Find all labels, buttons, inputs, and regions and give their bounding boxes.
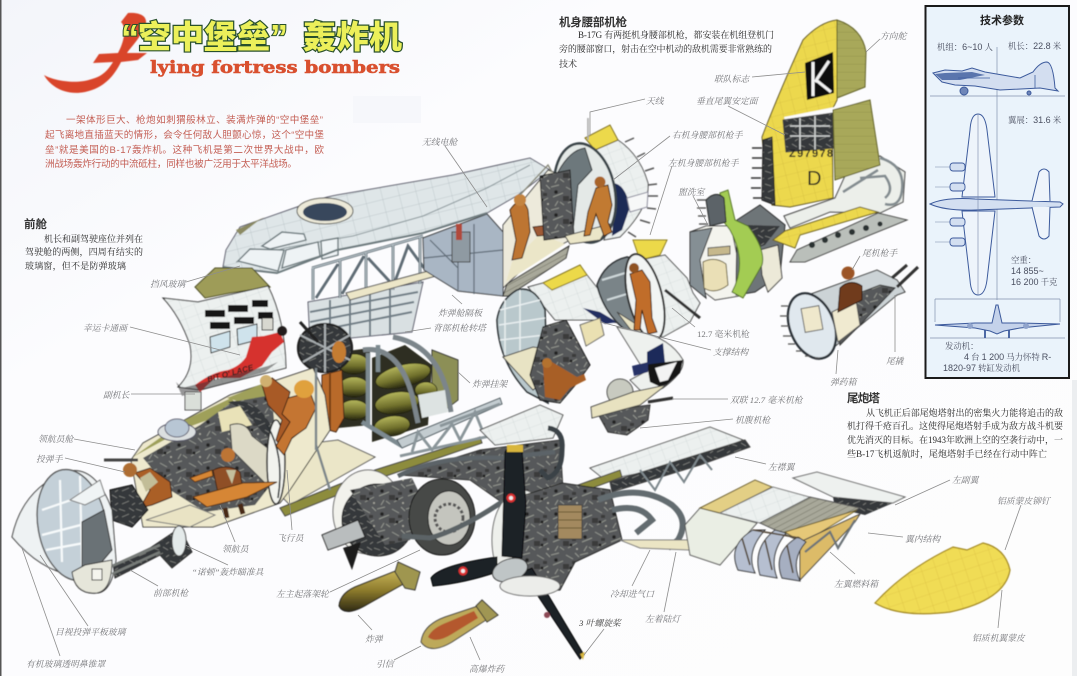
label: 领航员舱: 领航员舱 [38,434,74,444]
label: 投弹手: 投弹手 [36,454,64,464]
intro text [45,114,324,170]
label: 炸弹舱隔板: 炸弹舱隔板 [438,308,483,318]
label: 3叶螺旋桨: 3 叶螺旋桨 [578,618,622,628]
bombardier [135,468,172,508]
label: 副机长: 副机长 [103,390,131,400]
label: 无线电舱: 无线电舱 [422,137,458,147]
spec values: 机组：6~10 人 [937,42,994,52]
label: 炸弹 [358,615,384,644]
label: 支撑结构 [600,322,749,357]
label: 高爆炸药 [469,637,505,674]
title: Chinese headline: 轰炸机 [303,19,402,55]
label: 领航员 [220,505,250,554]
label: 引信 [376,646,421,669]
label: 冷却进气口 [610,550,655,599]
label: 联队标志: 联队标志 [714,74,750,84]
section: vertical tail fin: D [807,168,821,190]
section: cockpit shell with nose art [163,268,287,410]
label: 副机长 [103,390,195,400]
text block: waist guns: 机身腰部机枪 [559,15,628,29]
text block: tail turret: 优先消灭的目标。在1943年欧洲上空的空袭行动中，一 [847,434,1063,446]
label: 高爆炸药: 高爆炸药 [469,664,505,674]
label: 铝质蒙皮铆钉 [997,496,1052,550]
section: waist section with gunner and insignia [540,118,658,247]
section: grey-blue radio bay panels [423,214,503,296]
label: 天线: 天线 [646,96,665,106]
label: 背部机枪转塔 [405,323,488,333]
section: rear fuselage star insignia [617,327,683,395]
text block: waist guns: 技术 [559,58,577,69]
label: 3叶螺旋桨 [578,618,622,655]
label: 飞行员 [277,470,305,543]
label: 挡风玻璃 [150,266,240,289]
section: bomb [339,562,420,612]
label: 炸弹挂架 [458,372,508,389]
label: 左主起落架轮: 左主起落架轮 [276,589,330,599]
section: forward fuselage with navigator station [104,368,330,527]
label: 双联12.7毫米机枪: 双联 12.7 毫米机枪 [730,395,804,405]
label: 左襟翼 [735,457,796,472]
text block: waist guns: 旁的腰部窗口，射击在空中机动的敌机需要非常熟练的 [559,43,772,55]
section: outer wing with ribs and fuel tanks [685,472,905,581]
title: English subtitle: lying fortress bombers [150,58,400,78]
label: 尾机枪手 [852,248,898,270]
spec values: 1820-97 转缸发动机 [943,363,1021,373]
label: 炸弹: 炸弹 [365,634,384,644]
text block: forward cabin [24,217,143,272]
label: 左副翼: 左副翼 [952,475,980,485]
section: inboard engine and mechanics [322,428,563,570]
label: 有机玻璃透明鼻锥罩: 有机玻璃透明鼻锥罩 [26,659,106,669]
title: Chinese headline: “ [121,17,139,58]
label: 铝质蒙皮铆钉: 铝质蒙皮铆钉 [997,496,1052,506]
label: 机腹机枪: 机腹机枪 [735,415,771,425]
label: 冷却进气口: 冷却进气口 [610,589,655,599]
label: 弹药箱: 弹药箱 [830,377,858,387]
label: 铝质机翼蒙皮: 铝质机翼蒙皮 [972,633,1026,643]
section: first gunner compartment [503,165,575,296]
text block: tail turret: 从飞机正后部尾炮塔射出的密集火力能将追击的敌 [866,407,1063,418]
section: landing gear wheel [402,479,502,555]
section: truss frame and lower bay [308,236,468,342]
label: 盥洗室 [678,187,708,225]
intro text: 垒”就是美国的B-17轰炸机。这种飞机是第二次世界大战中，欧 [45,144,324,156]
title: Chinese headline: ” [270,17,288,58]
label: 机腹机枪 [640,415,771,428]
label: 左着陆灯: 左着陆灯 [645,614,682,624]
section: upper fuselage with cockpit roof [223,158,550,273]
panel: technical specifications [926,6,1069,378]
section: floor and wing roots [280,398,563,516]
pilots [262,378,305,452]
label: 幸运卡通画: 幸运卡通画 [83,323,129,333]
section: chin gun [112,526,192,578]
text block: waist guns [559,15,774,69]
label: 翼内结构 [868,533,941,544]
label: 左副翼 [895,475,980,505]
label: 翼内结构: 翼内结构 [905,534,941,544]
intro text: 洲战场轰炸行动的中流砥柱，同样也被广泛用于太平洋战场。 [45,158,297,170]
label: 无线电舱 [422,137,487,207]
label: 挡风玻璃: 挡风玻璃 [150,279,187,289]
intro text: 起飞离地直插蓝天的情形，会令任何敌人胆颤心惊，这个“空中堡 [45,129,324,141]
spec values: 14 855~ [1011,266,1044,276]
section: outer wing truss and skin [528,427,750,511]
label: 炸弹挂架: 炸弹挂架 [472,379,508,389]
title: Chinese headline [121,17,402,58]
label: 方向舵: 方向舵 [880,31,908,41]
spec values: 空重： [1011,255,1036,265]
title logo: red F swoosh [44,13,147,93]
label: 有机玻璃透明鼻锥罩 [22,548,106,669]
label: 12.7毫米机枪 [672,308,750,339]
spec values: 16 200 千克 [1011,277,1058,287]
text block: tail turret: 机打得千疮百孔。这使得尾炮塔射手成为敌方战斗机要 [847,420,1063,431]
section: tail gunner compartment [779,265,918,366]
section: aluminium wing tip [875,543,1010,614]
label: 诺顿轰炸瞄准具 [185,545,265,577]
label: 12.7毫米机枪: 12.7 毫米机枪 [697,328,750,339]
pin-up figure [195,332,284,392]
blueprint: top view [930,114,1063,295]
label: 左着陆灯 [645,552,682,624]
navigator and table [213,467,243,493]
label: 领航员舱 [38,434,135,450]
text block: tail turret: 些B-17飞机返航时，尾炮塔射手已经在行动中阵亡 [847,448,1047,460]
label: 左翼燃料箱 [830,552,879,589]
title: Chinese headline: 空中堡垒 [138,19,270,55]
label: 方向舵 [866,31,908,52]
section: lower ball turret [591,379,673,435]
label: 领航员: 领航员 [222,544,250,554]
section: bomb bay racks and bombs [338,337,458,446]
text block: forward cabin: 机长和副驾驶座位并列在 [44,233,143,244]
label: 支撑结构: 支撑结构 [713,347,749,357]
blueprint: front view [930,299,1065,338]
spec heading: 技术参数 [980,13,1024,27]
spec values: 翼展：31.6 米 [1008,115,1062,125]
text block: tail turret: 尾炮塔 [847,391,880,405]
label: 天线 [590,96,665,135]
label: 尾撬 [886,295,905,366]
text block: forward cabin: 驾驶舱的两侧，四周有结实的 [25,246,143,258]
label: 铝质机翼蒙皮 [972,590,1026,643]
label: 幸运卡通画 [83,323,240,355]
label: 右机身腰部机枪手 [613,130,744,180]
label: 联队标志 [714,72,805,84]
spec values [937,41,1062,373]
section: vertical tail fin [751,20,880,207]
label: 左机身腰部机枪手 [650,158,740,235]
label: 右机身腰部机枪手: 右机身腰部机枪手 [672,130,744,140]
section: vertical tail fin: Z97978 [789,148,833,160]
intro text: 一架体形巨大、枪炮如刺猬般林立、装满炸弹的“空中堡垒” [66,114,323,126]
section: cockpit shell with nose art: BIT O' LACE [206,363,255,384]
section: three-blade propeller [431,445,585,660]
text block: forward cabin: 玻璃窗，但不是防弹玻璃 [25,260,126,272]
label: 弹药箱 [830,350,858,387]
section: tail plane and ducting [773,156,907,262]
section: dorsal turret with gunner [298,322,352,432]
section: radio room ring with yellow strip [497,265,620,403]
label: 前部机枪: 前部机枪 [153,588,189,598]
label: 尾机枪手: 尾机枪手 [862,248,898,258]
label: 目视投弹平板玻璃: 目视投弹平板玻璃 [55,627,128,637]
label: 诺顿轰炸瞄准具: “诺顿”轰炸瞄准具 [192,567,265,577]
label: 飞行员: 飞行员 [277,533,305,543]
spec values: 机长：22.8 米 [1008,41,1062,51]
text block: forward cabin: 前舱 [24,217,48,231]
label: 左翼燃料箱: 左翼燃料箱 [834,579,879,589]
label: 目视投弹平板玻璃 [40,555,128,637]
label: 尾撬: 尾撬 [886,356,905,366]
label: 双联12.7毫米机枪 [672,395,804,405]
label: 前部机枪 [130,570,189,598]
label: 垂直尾翼安定面: 垂直尾翼安定面 [696,96,760,106]
spec values: 发动机： [945,341,978,351]
section: glazed nose [12,464,116,593]
blueprint: side view [930,47,1065,300]
text block: waist guns: B-17G 有两挺机身腰部机枪，都安装在机组登机门 [578,29,774,41]
label: 引信: 引信 [376,659,395,669]
section: rear compartment ring with green band [690,190,785,300]
label: 左襟翼: 左襟翼 [768,462,796,472]
section: outboard engine [492,483,692,592]
text block: tail turret [847,391,1063,460]
label: 背部机枪转塔: 背部机枪转塔 [433,323,488,333]
label: 左机身腰部机枪手: 左机身腰部机枪手 [668,158,740,168]
section: cutaway bomb [421,600,498,648]
label: 垂直尾翼安定面 [696,96,785,135]
spec values: 4 台 1 200 马力怀特 R- [964,352,1051,362]
label: 左主起落架轮 [276,550,420,599]
label: 投弹手 [36,454,125,472]
section: rear waist with gunner and yellow strip [597,240,700,344]
label: 炸弹舱隔板 [438,295,483,318]
label: 盥洗室: 盥洗室 [678,187,706,197]
